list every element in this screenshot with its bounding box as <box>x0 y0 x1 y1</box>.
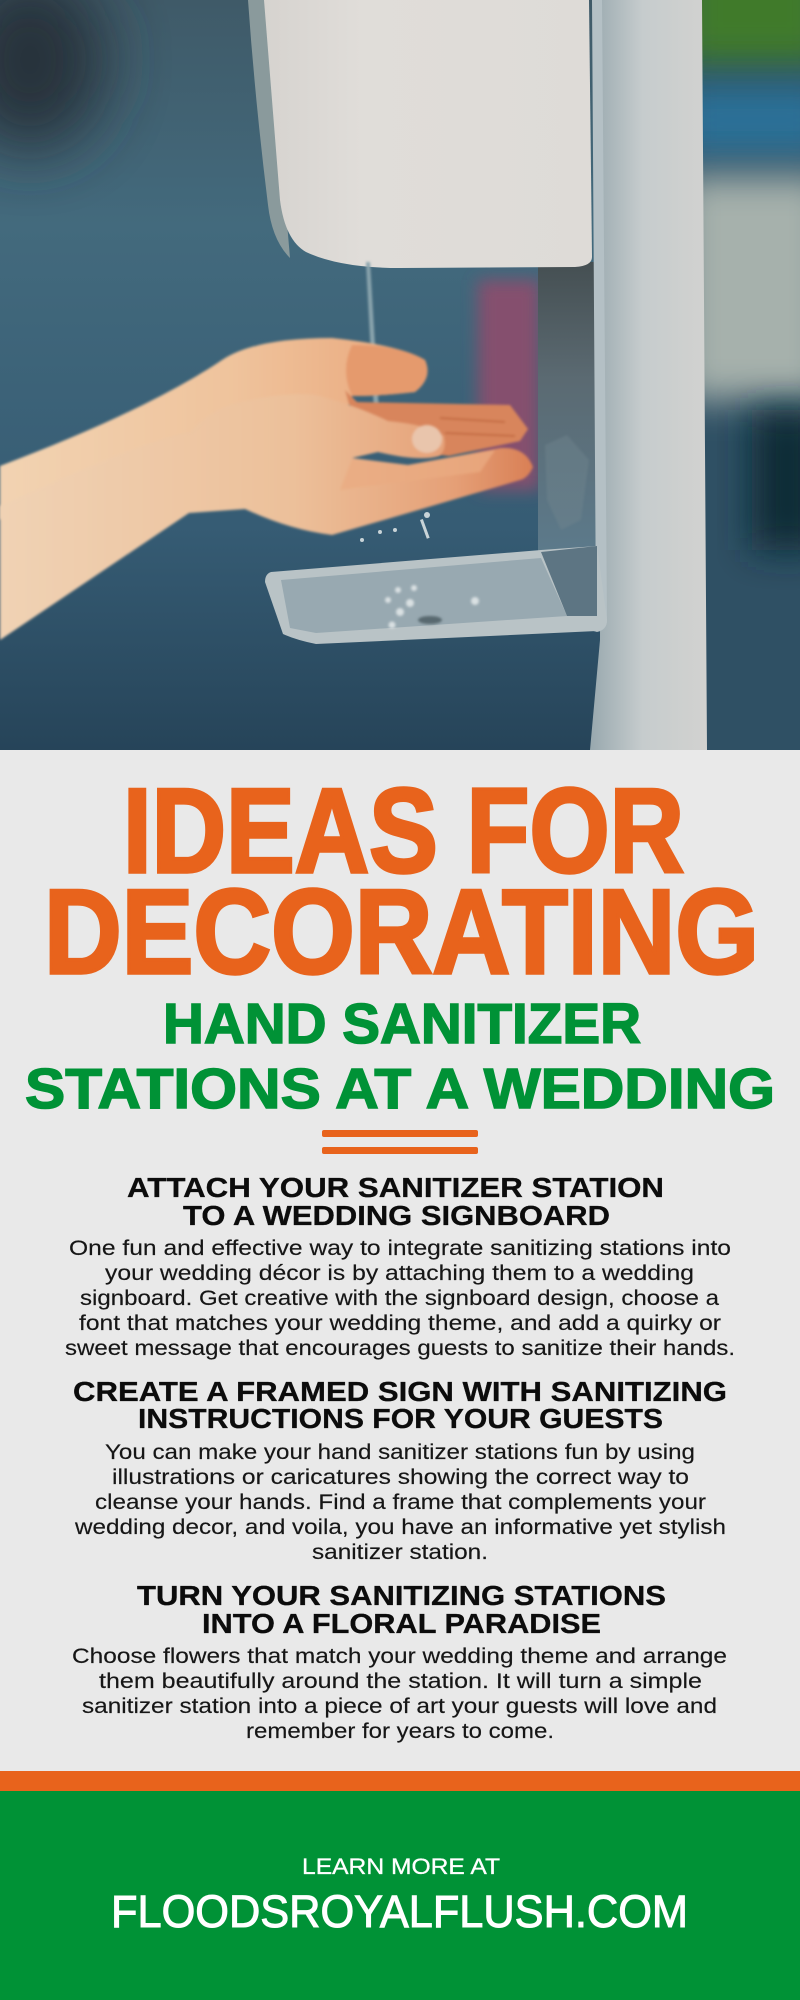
thumb nail <box>412 425 442 453</box>
blurred right background <box>702 0 800 750</box>
subtitle line 1: HAND SANITIZER <box>163 992 641 1056</box>
back hand <box>0 338 528 520</box>
section 3 body: sanitizer station into a piece of art your guests will love and <box>82 1695 717 1718</box>
photo: hands under a sanitizer dispenser <box>0 0 800 750</box>
section 3 <box>72 1580 727 1743</box>
section 1 <box>65 1172 735 1360</box>
section 3 heading <box>137 1580 666 1639</box>
section 1 body: sweet message that encourages guests to sanitize their hands. <box>65 1337 735 1360</box>
stand pole <box>590 0 707 750</box>
website url: FLOODSROYALFLUSH.COM <box>111 1886 688 1937</box>
double rule divider <box>322 1130 478 1154</box>
title <box>44 764 759 999</box>
orange band <box>0 1771 800 1791</box>
soap stream <box>366 262 379 412</box>
section 1 body: signboard. Get creative with the signboard design, choose a <box>80 1287 719 1310</box>
section 1 body <box>65 1237 735 1360</box>
sensor reflection <box>546 437 587 527</box>
section 2 heading: INSTRUCTIONS FOR YOUR GUESTS <box>138 1403 663 1434</box>
front hand <box>0 394 533 640</box>
section 2 body: sanitizer station. <box>312 1541 488 1564</box>
subtitle line 2: STATIONS AT A WEDDING <box>25 1057 775 1121</box>
section 3 body: them beautifully around the station. It will turn a simple <box>99 1670 702 1693</box>
section 2 heading <box>73 1376 727 1434</box>
section 2 body: cleanse your hands. Find a frame that complements your <box>95 1491 706 1514</box>
dispenser back plate <box>538 262 596 554</box>
section 2 body: illustrations or caricatures showing the correct way to <box>112 1466 689 1489</box>
section 2 body: wedding decor, and voila, you have an informative yet stylish <box>74 1516 726 1539</box>
learn more label: LEARN MORE AT <box>302 1854 500 1879</box>
blurred dark corner <box>0 0 105 150</box>
section 1 heading <box>127 1172 664 1231</box>
section 1 body: your wedding décor is by attaching them to a wedding <box>105 1262 694 1285</box>
section 2 body: You can make your hand sanitizer stations fun by using <box>105 1441 695 1464</box>
section 1 body: One fun and effective way to integrate sanitizing stations into <box>69 1237 731 1260</box>
section 2 heading: CREATE A FRAMED SIGN WITH SANITIZING <box>73 1376 727 1407</box>
pink reflection <box>478 280 540 490</box>
section 2 body <box>74 1441 726 1564</box>
dispenser body <box>248 0 592 268</box>
title line 1: IDEAS FOR <box>123 764 684 898</box>
section 1 heading: ATTACH YOUR SANITIZER STATION <box>127 1172 664 1203</box>
section 3 heading: TURN YOUR SANITIZING STATIONS <box>137 1580 666 1611</box>
footer <box>0 1791 800 2000</box>
droplets <box>385 585 479 628</box>
section 3 body <box>72 1645 727 1743</box>
section 3 body: remember for years to come. <box>246 1720 554 1743</box>
section 1 heading: TO A WEDDING SIGNBOARD <box>183 1200 610 1231</box>
section 1 body: font that matches your wedding theme, and add a quirky or <box>79 1312 721 1335</box>
subtitle <box>25 992 775 1121</box>
section 3 body: Choose flowers that match your wedding theme and arrange <box>72 1645 727 1668</box>
section 2 <box>73 1376 727 1564</box>
section 3 heading: INTO A FLORAL PARADISE <box>202 1608 601 1639</box>
bracket edge <box>592 0 607 632</box>
drip tray <box>265 512 607 644</box>
